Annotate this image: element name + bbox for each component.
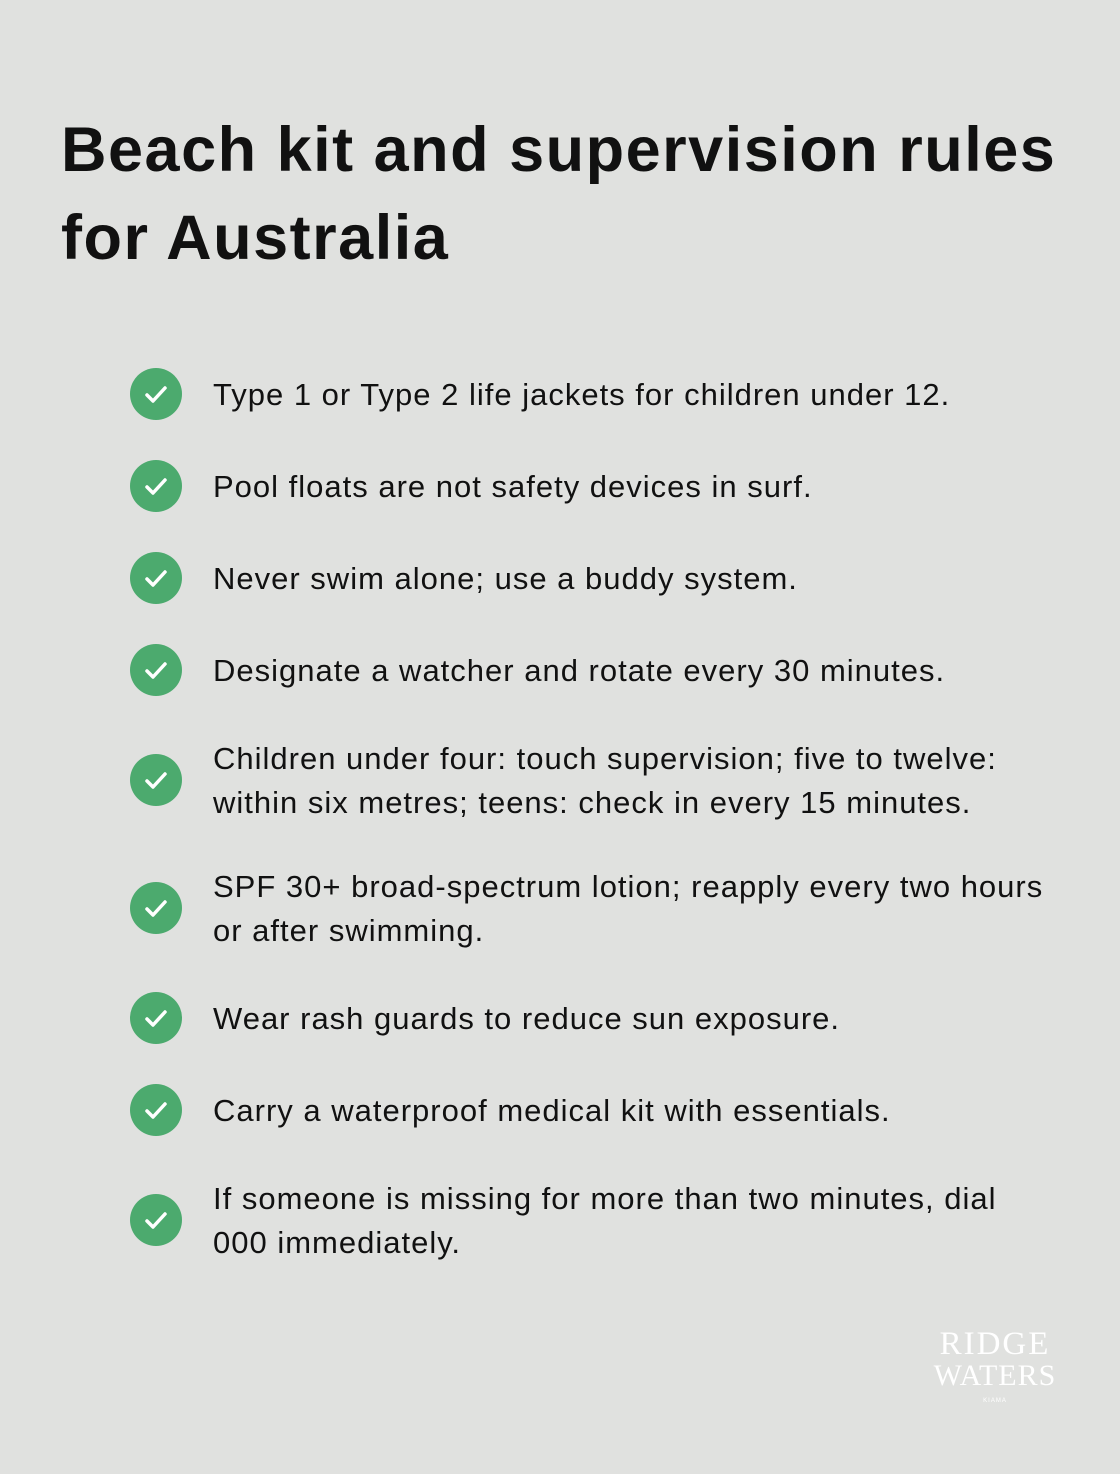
item 6: SPF 30+ broad-spectrum lotion; reapply every two hours: [213, 869, 1043, 904]
item 9: 000 immediately.: [213, 1225, 461, 1260]
title: Beach kit and supervision rules: [61, 115, 1056, 185]
item 6: [130, 869, 1043, 948]
item 1: Type 1 or Type 2 life jackets for children under 12.: [213, 377, 950, 412]
item 7: Wear rash guards to reduce sun exposure.: [213, 1001, 840, 1036]
item 5: within six metres; teens: check in every 15 minutes.: [213, 785, 971, 820]
item 4: [130, 644, 945, 696]
item 1: [130, 368, 950, 420]
item 9: If someone is missing for more than two minutes, dial: [213, 1181, 997, 1216]
logo: KIAMA: [983, 1398, 1007, 1404]
item 9: [130, 1181, 997, 1260]
title: [61, 115, 1056, 273]
item 4: Designate a watcher and rotate every 30 minutes.: [213, 653, 945, 688]
item 7: [130, 992, 840, 1044]
item 2: Pool floats are not safety devices in surf.: [213, 469, 813, 504]
item 8: Carry a waterproof medical kit with essentials.: [213, 1093, 891, 1128]
item 5: [130, 741, 997, 820]
logo: WATERS: [934, 1359, 1056, 1392]
item 2: [130, 460, 813, 512]
item 6: or after swimming.: [213, 913, 484, 948]
item 5: Children under four: touch supervision; five to twelve:: [213, 741, 997, 776]
item 3: Never swim alone; use a buddy system.: [213, 561, 798, 596]
item 3: [130, 552, 798, 604]
title: for Australia: [61, 203, 449, 273]
logo: RIDGE: [940, 1326, 1050, 1362]
item 8: [130, 1084, 891, 1136]
logo: [934, 1326, 1056, 1404]
